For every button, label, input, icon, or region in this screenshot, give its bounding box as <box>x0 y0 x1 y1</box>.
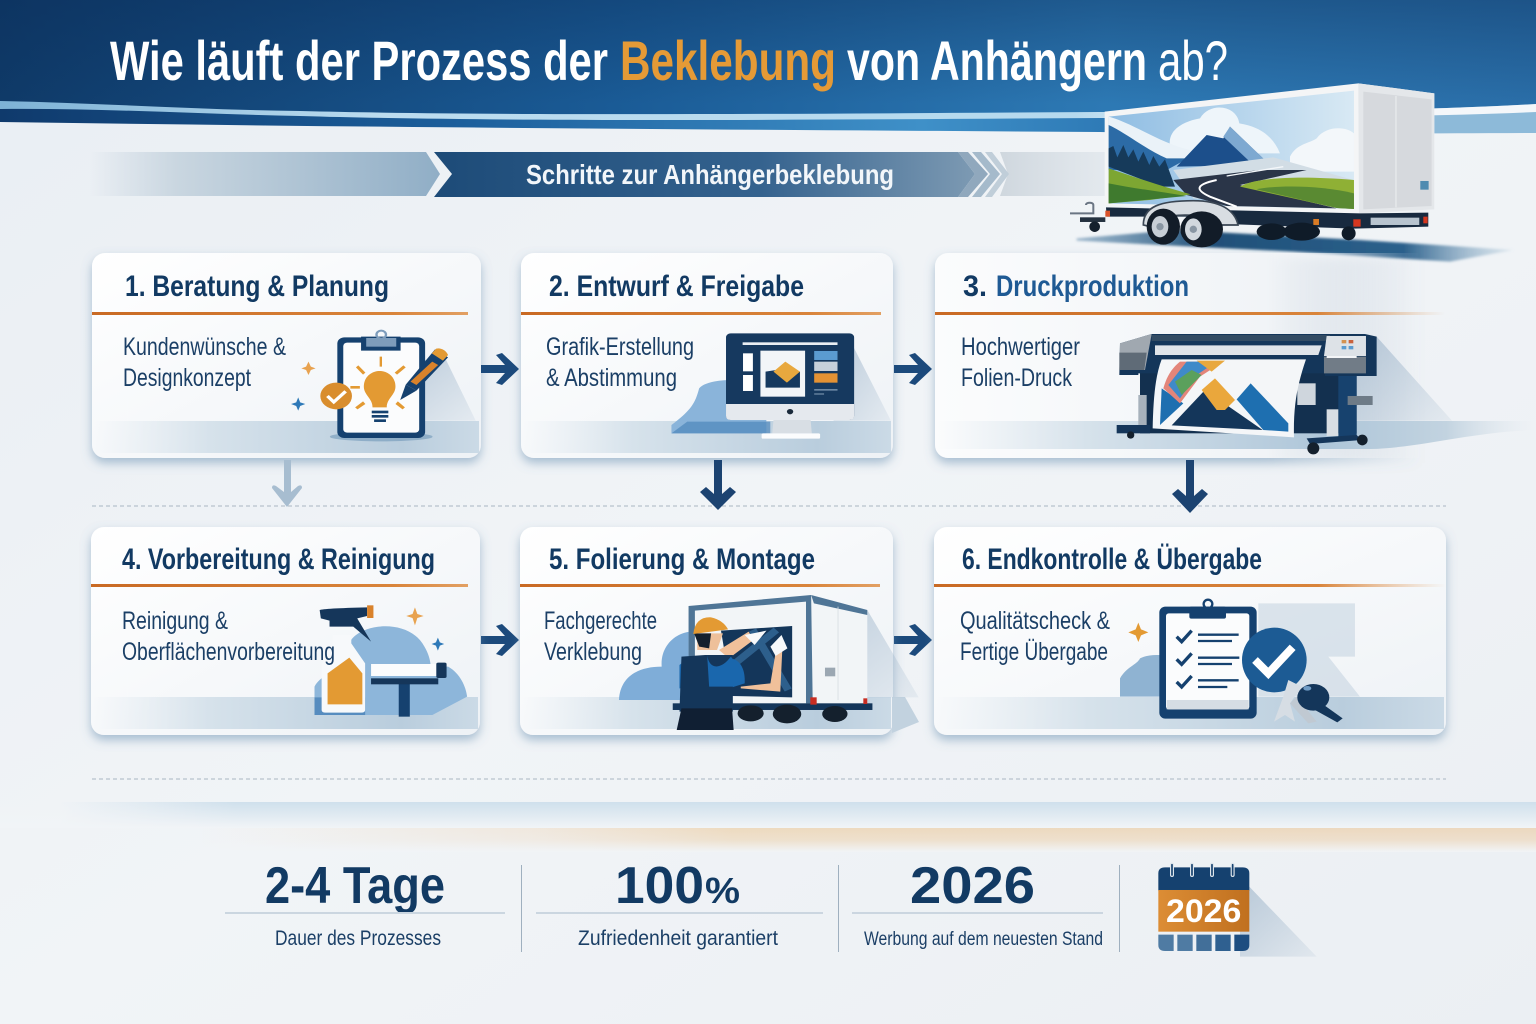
heading: 4. Vorbereitung & Reinigung <box>122 543 435 576</box>
trailer <box>1070 83 1513 262</box>
title: Beklebung <box>620 29 836 92</box>
panel: step 2 <box>521 253 893 458</box>
section banner: Schritte zur Anhängerbeklebung <box>526 159 894 190</box>
title: ab? <box>1158 29 1228 92</box>
title <box>110 29 1228 92</box>
text block <box>961 333 1080 392</box>
text block <box>544 607 657 666</box>
arrow: step 2 down <box>700 460 736 510</box>
stat: year: Werbung auf dem neuesten Stand <box>864 929 1103 950</box>
icon: monitor <box>671 333 891 439</box>
panel: step 6 <box>934 527 1446 735</box>
text block: & Abstimmung <box>546 364 677 392</box>
panel: step 4 <box>91 527 480 735</box>
text block <box>960 607 1110 666</box>
icon: checklist, check badge and keys <box>1120 600 1360 723</box>
text block: Oberflächenvorbereitung <box>122 638 335 666</box>
text block: Fertige Übergabe <box>960 638 1108 666</box>
arrow: step 4 to 5 <box>481 624 519 656</box>
text block: Grafik-Erstellung <box>546 333 694 361</box>
stat: satisfaction: 100 <box>615 857 704 915</box>
text block <box>122 607 335 666</box>
heading: 3. <box>963 270 987 303</box>
text block: Kundenwünsche & <box>123 333 286 361</box>
stat: duration <box>225 857 505 950</box>
arrow: step 5 to 6 <box>894 624 932 656</box>
illustration: worker applying foil <box>619 595 919 730</box>
arrow: step 2 to 3 <box>894 353 932 385</box>
icon: wide format printer <box>1117 334 1452 454</box>
arrow: step 1 down <box>272 460 302 507</box>
heading: 5. Folierung & Montage <box>549 543 815 576</box>
icon: spray bottle and squeegee <box>315 605 467 717</box>
arrow: step 1 to 2 <box>481 353 519 385</box>
section banner <box>90 152 1110 197</box>
panel: step 3 <box>935 253 1536 458</box>
stat: duration: 2-4 Tage <box>265 857 445 915</box>
icon: calendar 2026: 2026 <box>1166 893 1241 929</box>
text block: Fachgerechte <box>544 607 657 635</box>
icon: calendar 2026 <box>1158 865 1317 957</box>
icon: clipboard with bulb <box>291 331 476 441</box>
text block <box>123 333 286 392</box>
header band <box>0 0 1536 134</box>
text block: Folien-Druck <box>961 364 1072 392</box>
heading: 2. Entwurf & Freigabe <box>549 270 804 303</box>
arrow: step 3 down <box>1172 460 1208 513</box>
text block: Reinigung & <box>122 607 228 635</box>
heading: 6. Endkontrolle & Übergabe <box>962 543 1262 576</box>
panel: step 5 <box>520 527 919 735</box>
stat: year <box>852 857 1103 950</box>
title: Wie läuft der Prozess der <box>110 29 608 92</box>
text block: Qualitätscheck & <box>960 607 1110 635</box>
text block <box>546 333 694 392</box>
panel: step 1 <box>92 253 481 458</box>
text block: Designkonzept <box>123 364 251 392</box>
stat: duration: Dauer des Prozesses <box>275 927 441 950</box>
text block: Hochwertiger <box>961 333 1080 361</box>
title: von Anhängern <box>847 29 1147 92</box>
stat: satisfaction: Zufriedenheit garantiert <box>578 927 778 950</box>
stat: year: 2026 <box>910 857 1035 915</box>
heading: Druckproduktion <box>996 270 1189 303</box>
text block: Verklebung <box>544 638 642 666</box>
stat: satisfaction <box>536 857 823 950</box>
decorative bands <box>0 802 1536 852</box>
heading: 1. Beratung & Planung <box>125 270 389 303</box>
stat: satisfaction: % <box>705 870 740 911</box>
